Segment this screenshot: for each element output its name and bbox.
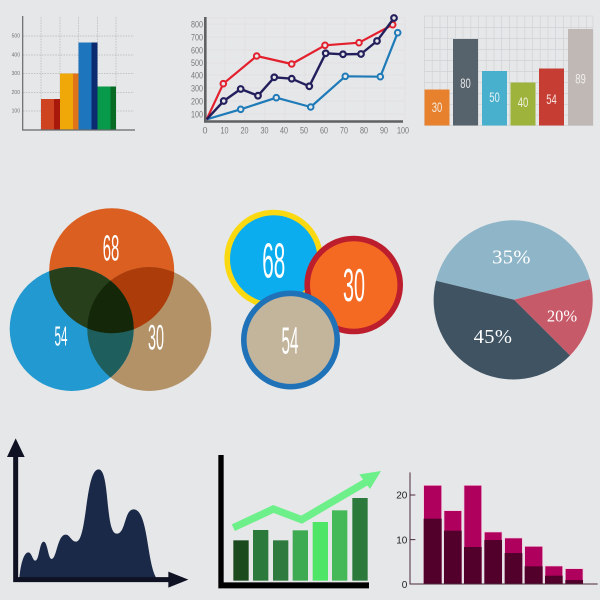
slice: 35%: 35% (492, 246, 531, 268)
x axis labels: 0 (202, 126, 208, 136)
y axis labels: 300 (12, 71, 20, 77)
chart: venn diagram: 30 (148, 318, 164, 358)
bar: 40: 40 (518, 94, 528, 110)
bar: 30: 30 (432, 99, 442, 115)
overlap: orange and tan (87, 267, 174, 330)
bar: 80 (453, 39, 478, 126)
axes (218, 455, 369, 588)
chart: area chart bottom left (7, 438, 188, 588)
x axis labels: 80 (360, 126, 368, 136)
bar: 50: 50 (489, 89, 500, 105)
y axis labels: 100 (191, 110, 203, 120)
x axis labels: 50 (300, 126, 308, 136)
overlap: centre (87, 280, 134, 334)
y axis labels: 400 (12, 53, 20, 59)
chart: pie (434, 220, 593, 379)
bar: 30 (424, 90, 450, 126)
axis labels: 10 (396, 535, 408, 546)
y axis labels: 500 (191, 58, 203, 69)
bar: blue (78, 42, 98, 130)
axes (23, 16, 135, 130)
slice: 45% (434, 281, 570, 379)
circle: 30 (307, 238, 400, 332)
chart: green bars with arrow (218, 455, 381, 588)
y axis labels: 200 (12, 90, 20, 96)
bars (424, 485, 583, 584)
x axis labels: 70 (340, 126, 348, 136)
bar: yellow (60, 74, 78, 130)
chart: stacked magenta bars (396, 472, 598, 591)
x axis labels (202, 126, 409, 136)
series: blue (207, 30, 401, 119)
x axis labels: 40 (280, 126, 288, 136)
overlap: orange and blue (49, 267, 134, 334)
axes (205, 17, 403, 122)
bar: 80: 80 (460, 75, 471, 91)
circle: 54 (244, 293, 337, 387)
area (19, 469, 157, 578)
bar: 89: 89 (575, 70, 586, 86)
arrowhead: right (168, 572, 188, 588)
series: navy (207, 15, 397, 119)
circle: orange (49, 208, 174, 333)
slice: 45%: 45% (474, 326, 512, 348)
slice: 35% (436, 220, 590, 300)
axis labels (396, 491, 408, 591)
x axis labels: 60 (320, 126, 328, 136)
chart: overlapping ringed circles (227, 212, 400, 387)
x axis labels: 30 (260, 126, 268, 136)
series: red (207, 22, 396, 119)
axes (16, 453, 172, 580)
slice: 20%: 20% (547, 306, 577, 326)
chart: line chart top centre (191, 15, 409, 136)
bar: red (41, 99, 60, 130)
circle: 30: 30 (343, 259, 365, 311)
y axis labels (191, 20, 203, 120)
x axis labels: 90 (380, 126, 388, 136)
bar: 50 (482, 71, 507, 126)
bar: green (98, 86, 116, 130)
bar: 54 (539, 68, 564, 126)
y axis labels: 600 (191, 46, 203, 56)
bar: 40 (510, 82, 536, 126)
axis labels: 0 (402, 580, 408, 591)
y axis labels: 100 (12, 109, 20, 115)
y axis labels: 700 (191, 32, 203, 44)
y axis labels: 400 (191, 70, 203, 82)
circle: 68 (227, 212, 320, 306)
bar: 89 (568, 29, 593, 126)
chart: labelled bars on grid top right (424, 16, 593, 126)
x axis labels: 10 (220, 126, 228, 136)
circle: 68: 68 (262, 234, 285, 288)
slice: 20% (514, 279, 593, 356)
arrowhead: up (7, 438, 25, 457)
y axis labels: 800 (191, 20, 203, 30)
y axis labels (12, 34, 20, 115)
circle: blue (10, 267, 134, 391)
axis labels: 20 (396, 491, 408, 502)
axes (410, 472, 598, 584)
y axis labels: 200 (191, 96, 203, 108)
arrow (233, 471, 381, 528)
y axis labels: 500 (12, 34, 20, 40)
bar: 54: 54 (546, 91, 557, 107)
bars (233, 498, 368, 581)
circle: 54: 54 (282, 320, 298, 362)
chart: venn diagram: 54 (54, 320, 68, 352)
y axis labels: 300 (191, 84, 203, 94)
chart: venn diagram (10, 208, 211, 391)
chart: venn diagram: 68 (103, 228, 119, 268)
overlap: blue and tan (87, 280, 134, 378)
circle: tan (87, 267, 211, 391)
x axis labels: 20 (240, 126, 248, 136)
chart: 3D bar chart top left (12, 16, 135, 130)
x axis labels: 100 (397, 126, 409, 136)
